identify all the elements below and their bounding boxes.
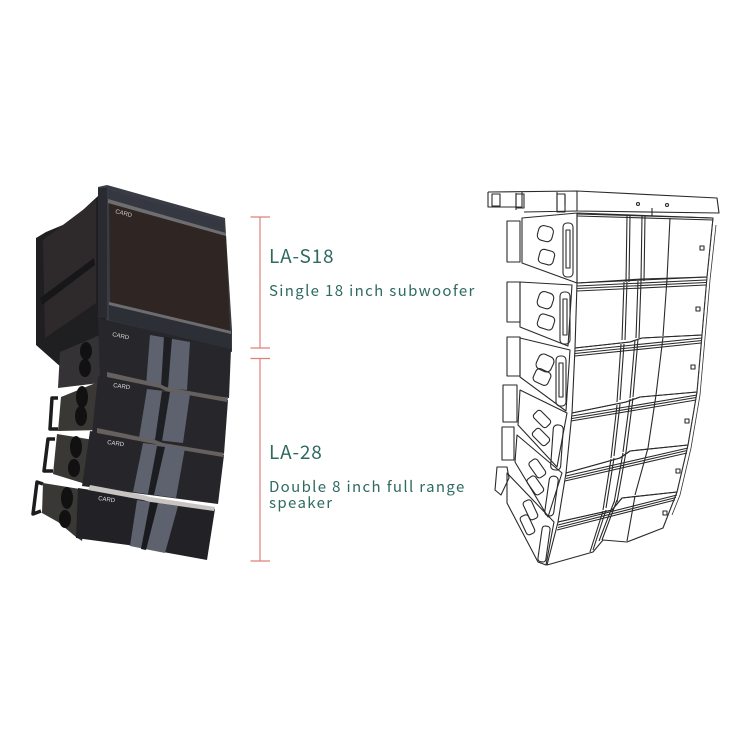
cabinet 2 outline xyxy=(507,277,707,348)
cabinet 1 xyxy=(58,318,231,398)
line drawing: speaker array xyxy=(488,191,719,565)
right edge rigging xyxy=(663,218,716,528)
LA-S18 subwoofer photo xyxy=(36,185,232,368)
flying frame xyxy=(488,191,719,220)
cabinet 5 outline xyxy=(502,427,688,522)
photo: speaker array xyxy=(33,185,232,560)
LA-S18 subwoofer photo: CARD xyxy=(115,209,133,219)
cabinet 2: CARD xyxy=(113,383,131,391)
cabinet 4 outline xyxy=(503,385,697,473)
cabinet 6 outline xyxy=(495,467,677,565)
bracket: LA-28 height xyxy=(250,358,270,561)
cabinet 3: CARD xyxy=(107,440,125,448)
text: LA-S18 description: Single 18 inch subwoofer xyxy=(269,280,476,301)
cabinet 4 xyxy=(33,482,215,560)
cabinet 1: CARD xyxy=(112,332,130,342)
label: LA-S18: LA-S18 xyxy=(269,242,334,269)
cabinet 1 outline xyxy=(507,213,713,283)
label: LA-28: LA-28 xyxy=(269,438,323,465)
LA-28 speaker stack photo xyxy=(33,318,231,560)
cabinet 2 xyxy=(50,372,228,454)
cabinet 4: CARD xyxy=(98,496,116,504)
bracket: LA-S18 height xyxy=(250,217,270,348)
text: LA-28 description: Double 8 inch full range xyxy=(269,476,466,497)
cabinet 3 outline xyxy=(507,335,702,413)
text: LA-28 description: speaker xyxy=(269,492,333,513)
cabinet 3 xyxy=(44,428,224,504)
